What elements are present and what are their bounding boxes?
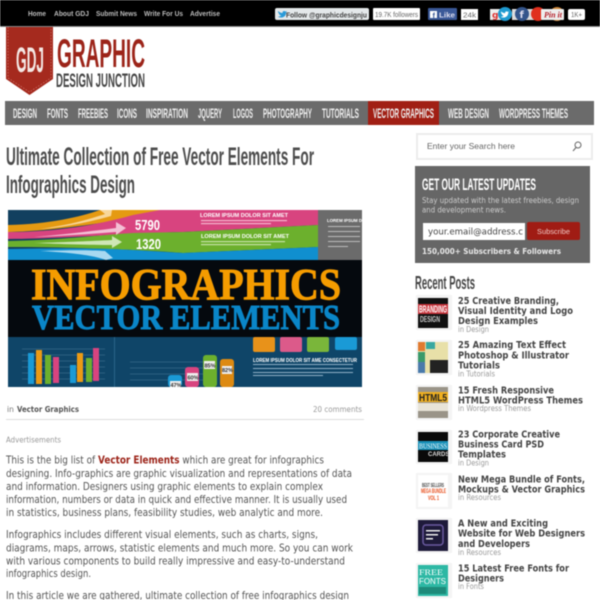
recent post 6: and Developers	[458, 539, 530, 550]
recent post 6: Website for Web Designers	[458, 528, 585, 540]
chart caption	[253, 358, 357, 376]
thumbnail: mega bundle	[416, 473, 452, 509]
post meta: Vector Graphics	[17, 405, 79, 414]
main navigation: DESIGN	[13, 105, 37, 121]
search box: Enter your Search here	[427, 141, 515, 151]
ribbon numbers: 1320	[136, 236, 161, 253]
recent post 7: 15 Latest Free Fonts for	[458, 564, 569, 574]
top bar: About GDJ	[54, 9, 89, 18]
article title	[6, 143, 314, 199]
recent post 2: Photoshop & Illustrator	[458, 350, 569, 362]
social icons: Pin it	[544, 10, 563, 20]
newsletter panel	[415, 166, 590, 263]
thumbnail: business cards: BUSINESS	[419, 442, 447, 450]
main navigation: TUTORIALS	[322, 105, 359, 121]
subscribe button: Subscribe	[537, 227, 570, 236]
social icons: g	[492, 11, 498, 21]
recent post 2: in Tutorials	[458, 370, 495, 378]
main navigation: JQUERY	[198, 105, 222, 121]
chart caption: LOREM IPSUM DOLOR SIT AME CONSECTETUR	[253, 358, 357, 364]
recent post 1: Design Examples	[458, 316, 538, 327]
article title: Infographics Design	[6, 171, 135, 199]
top bar	[0, 0, 600, 27]
recent post 6	[416, 518, 585, 557]
article text: first paragraph: information, numbers or data in quick and effective manner. It is usually used	[6, 494, 347, 506]
social icons: f	[520, 10, 524, 21]
hero headline: VECTOR ELEMENTS	[32, 298, 340, 337]
main navigation: VECTOR GRAPHICS	[373, 105, 434, 121]
recent posts heading: Recent Posts	[415, 273, 475, 293]
facebook like button: f	[432, 11, 436, 20]
recent post 1: Visual Identity and Logo	[458, 306, 573, 317]
facebook like button: Like	[439, 10, 455, 20]
top bar: Write For Us	[144, 9, 183, 18]
text: DESIGN JUNCTION	[56, 70, 145, 92]
right bar chart	[130, 355, 234, 389]
thumbnail: html5: HTML5	[419, 393, 447, 404]
newsletter panel: and development news.	[422, 206, 506, 214]
main navigation: PHOTOGRAPHY	[263, 105, 312, 121]
article text: second paragraph	[6, 529, 354, 580]
thumbnail: branding	[416, 295, 452, 330]
recent post 4: Business Card PSD	[458, 440, 544, 450]
newsletter panel: 150,000+ Subscribers & Followers	[422, 247, 562, 256]
recent post 5: in Resources	[458, 493, 501, 502]
twitter follow button: Follow @graphicdesignju	[286, 10, 367, 20]
lower chart area	[8, 337, 362, 389]
article text: first paragraph: designing. Info-graphics are graphic visualization and representations of data	[6, 468, 352, 480]
ribbon captions: LOREM IPSUM D	[327, 218, 363, 223]
recent post 3: HTML5 WordPress Themes	[458, 396, 583, 406]
thumbnail: business cards: CARDS	[428, 452, 449, 458]
post meta: 20 comments	[313, 405, 362, 414]
recent post 5	[416, 473, 585, 509]
thumbnail: html5	[416, 385, 452, 420]
top bar: Submit News	[96, 9, 137, 18]
dark title band	[8, 260, 362, 337]
ribbon bands	[8, 210, 362, 260]
thumbnail: web designers site	[416, 518, 452, 553]
right bar chart: 60%	[188, 376, 199, 382]
logo	[6, 27, 145, 95]
top bar: Home	[28, 9, 46, 18]
post meta	[7, 405, 362, 414]
recent post 1: in Design	[458, 325, 489, 334]
thumbnail: mega bundle: VOL 1	[428, 495, 439, 502]
text: GRAPHIC	[57, 32, 145, 76]
recent post 3: in Wordpress Themes	[458, 404, 531, 413]
thumbnail: mega bundle: BEST SELLERS	[422, 483, 444, 489]
icon: magnifier	[573, 142, 581, 151]
recent post 7	[416, 563, 569, 598]
article title: Ultimate Collection of Free Vector Elements For	[6, 143, 314, 171]
email input: your.email@address.c	[428, 228, 523, 238]
article text: second paragraph: with various components to build really impressive and easy-to-understand	[6, 556, 345, 568]
ribbon captions: LOREM IPSUM DOLOR SIT AMET	[201, 234, 290, 240]
recent post 1: 25 Creative Branding,	[458, 296, 559, 307]
article text: second paragraph: Infographics includes different visual elements, such as charts, signs,	[6, 529, 318, 541]
main navigation: FONTS	[47, 105, 68, 121]
thumbnail: free fonts	[416, 563, 452, 598]
recent post 2: Tutorials	[458, 360, 500, 372]
main navigation: INSPIRATION	[146, 105, 188, 121]
hero image	[8, 210, 363, 389]
left bar chart	[22, 348, 105, 384]
ribbon captions: LOREM IPSUM DOLOR SIT AMET	[200, 213, 288, 219]
recent post 4: 23 Corporate Creative	[458, 430, 560, 440]
article text: first paragraph	[5, 454, 352, 519]
recent post 7: Designers	[458, 574, 504, 584]
top bar: Advertise	[190, 9, 220, 18]
thumbnail: free fonts: FREE	[419, 567, 443, 577]
recent post 3	[416, 385, 583, 420]
right bar chart: 85%	[204, 364, 216, 370]
recent post 6: in Resources	[458, 548, 501, 557]
facebook like button	[428, 8, 478, 20]
thumbnail: text effects	[416, 340, 452, 375]
right bar chart: 82%	[222, 368, 233, 374]
recent post 3: 15 Fresh Responsive	[458, 386, 554, 396]
recent post 4: Templates	[458, 450, 506, 460]
hero headline: INFOGRAPHICS	[31, 260, 341, 309]
recent post 2: 25 Amazing Text Effect	[458, 340, 566, 351]
article text: second paragraph: infographics design.	[6, 568, 91, 580]
main navigation: LOGOS	[233, 105, 253, 121]
recent post 1	[416, 295, 573, 334]
advertisements label: Advertisements	[6, 436, 61, 444]
search box	[416, 133, 593, 160]
twitter follow button: 19.7K followers	[375, 10, 418, 19]
ribbon numbers	[135, 217, 161, 253]
subscribe button	[527, 222, 580, 240]
thumbnail: business cards	[416, 430, 452, 464]
recent post 2	[416, 340, 569, 378]
thumbnail: branding: DESIGN	[420, 315, 440, 324]
recent post 6: A New and Exciting	[458, 518, 548, 530]
logo wordmark	[56, 32, 145, 92]
hero headline	[31, 260, 341, 337]
twitter follow button	[275, 8, 420, 20]
social icons: 1K+	[571, 10, 582, 19]
recent post 4	[416, 430, 560, 468]
newsletter panel: Stay updated with the latest freebies, design	[422, 196, 579, 205]
facebook like button: 24k	[463, 10, 476, 20]
article text: first paragraph: and information. Designers using graphic elements to explain complex	[6, 481, 323, 493]
article text: first paragraph: in statistics, business plans, feasibility studies, web analytic and more.	[6, 507, 323, 519]
ribbon captions	[200, 213, 363, 247]
article text: first paragraph: This is the big list of Vector Elements which are great for infographics	[5, 454, 324, 466]
right bar chart: 47%	[170, 383, 182, 389]
logo ribbon: GDJ	[16, 41, 44, 80]
cylinders	[253, 337, 357, 352]
post meta: in	[7, 405, 14, 414]
main navigation: WEB DESIGN	[448, 105, 489, 121]
thumbnail: mega bundle: MEGA BUNDLE	[421, 488, 446, 495]
recent post 7: in Fonts	[458, 582, 484, 591]
article text: second paragraph: diagrams, maps, arrows, statistic elements and much more. So you can work	[6, 542, 354, 554]
email input	[423, 223, 525, 240]
recent post 4: in Design	[458, 458, 489, 468]
social icons	[490, 7, 585, 21]
thumbnail: free fonts: FONTS	[419, 576, 446, 586]
main navigation: FREEBIES	[78, 105, 108, 121]
thumbnail: branding: BRANDING	[419, 304, 447, 316]
main navigation: ICONS	[117, 105, 137, 121]
main navigation	[5, 101, 594, 125]
ribbon numbers: 5790	[135, 217, 160, 234]
